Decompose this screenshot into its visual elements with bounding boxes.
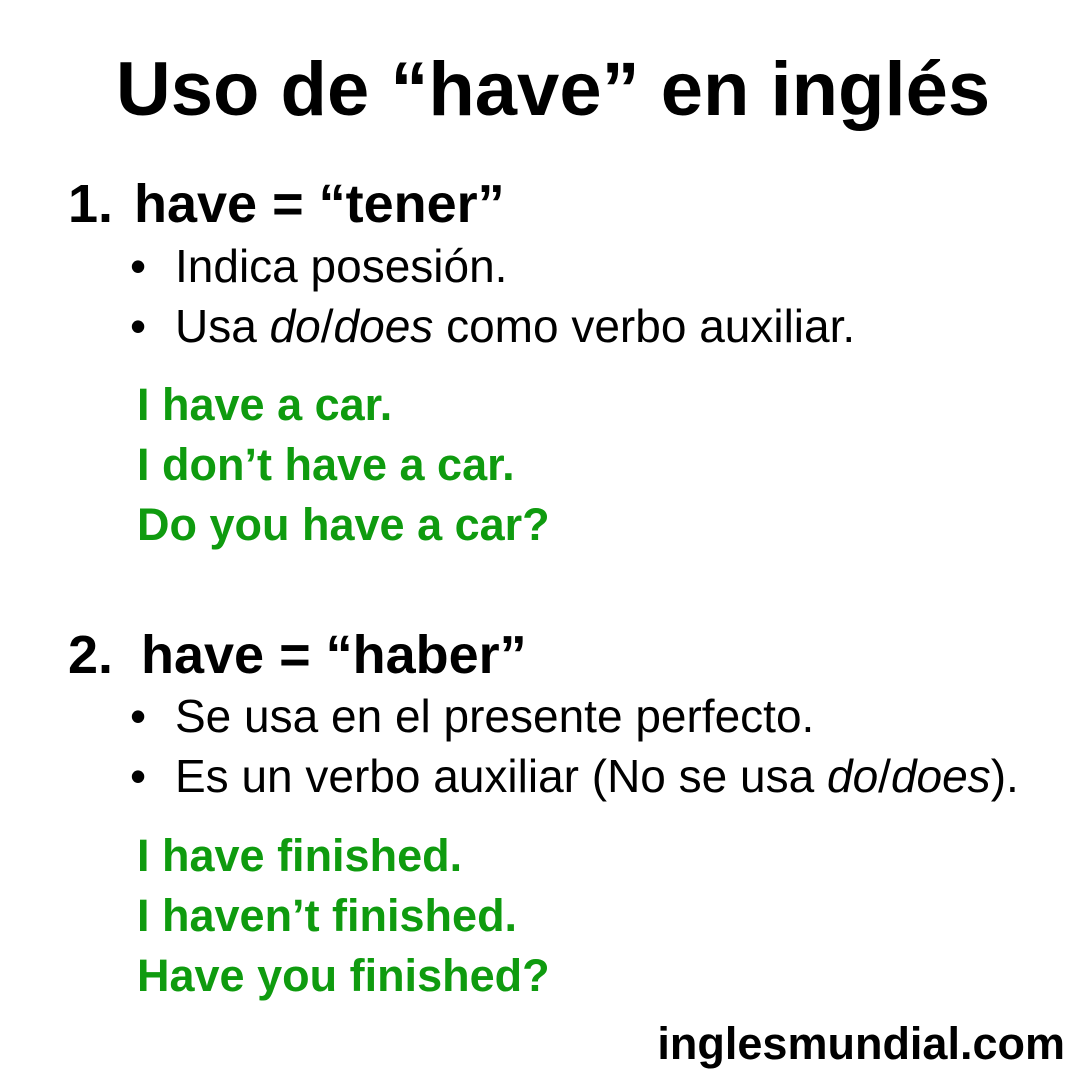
examples section 1: Do you have a car?	[137, 499, 550, 550]
examples section 1	[137, 379, 550, 550]
examples section 1: I have a car.	[137, 379, 392, 430]
bullet: possession: •	[130, 240, 146, 292]
bullet: possession: Indica posesión.	[175, 240, 507, 292]
heading: section 2: 2.	[68, 625, 113, 685]
heading: section 2: have = “haber”	[141, 625, 527, 685]
examples section 1: I don’t have a car.	[137, 439, 515, 490]
title: Uso de “have” en inglés	[116, 47, 990, 132]
bullet: auxiliary: Es un verbo auxiliar (No se usa do/does).	[175, 750, 1019, 802]
examples section 2	[137, 830, 550, 1001]
bullet: present perfect: Se usa en el presente perfecto.	[175, 690, 814, 742]
bullet: auxiliary: •	[130, 750, 146, 802]
bullet: do/does: Usa do/does como verbo auxiliar.	[175, 300, 855, 352]
examples section 2: I haven’t finished.	[137, 890, 517, 941]
bullet: present perfect: •	[130, 690, 146, 742]
bullet: do/does: •	[130, 300, 146, 352]
heading: section 1: have = “tener”	[134, 174, 505, 234]
examples section 2: I have finished.	[137, 830, 462, 881]
footer: website: inglesmundial.com	[657, 1018, 1065, 1069]
examples section 2: Have you finished?	[137, 950, 550, 1001]
heading: section 1: 1.	[68, 174, 113, 234]
